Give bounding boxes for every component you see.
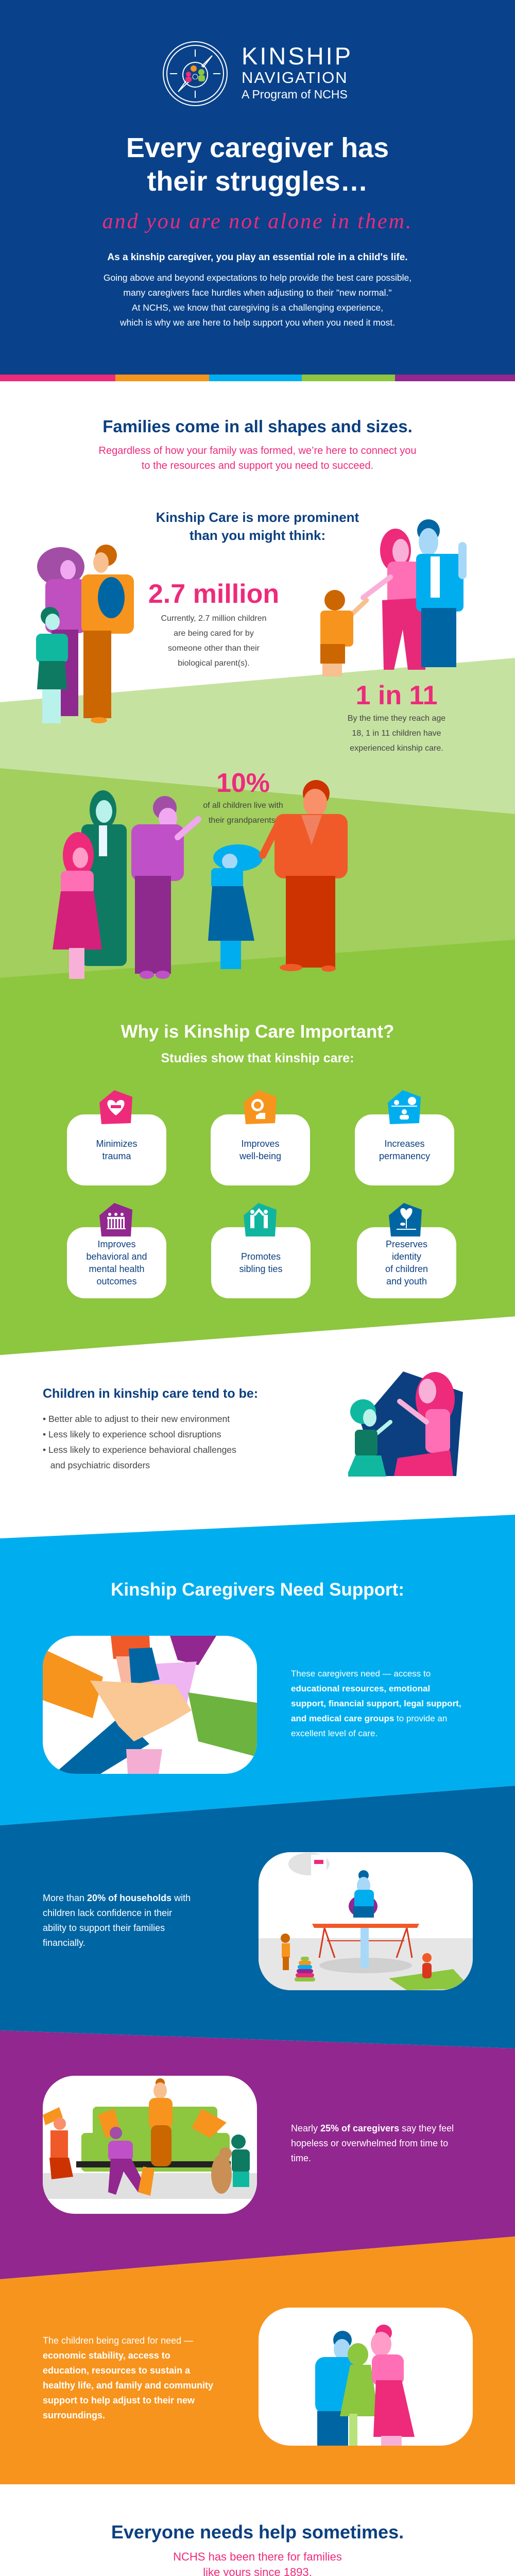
text: 25% of caregivers: Nearly 25% of caregivers say they feel hopeless or overwhelmed from time to time. [291,2123,454,2163]
bullet list: • Less likely to experience behavioral challenges [43,1445,236,1455]
stat: 2.7 million: are being cared for by [174,629,254,638]
stat: 10%: their grandparents. [209,816,278,825]
illustration: caregiver and child high five [348,1371,463,1477]
intro paragraph: many caregivers face hurdles when adjusting to their "new normal." [123,287,392,298]
card: minimizes trauma: Minimizes [96,1139,137,1149]
heading: why kinship care: Why is Kinship Care Important? [121,1022,394,1042]
script subtitle: and you are not alone in them. [102,210,413,233]
stat: 1 in 11: 18, 1 in 11 children have [352,729,441,738]
benefit cards [67,1114,456,1298]
card: permanency [355,1114,454,1185]
heading: families: Families come in all shapes and sizes. [102,417,413,436]
illustrations: families [36,519,467,979]
card: behavioral: outcomes [96,1276,137,1286]
stat: 10% [203,768,283,825]
stat: 1 in 11 [348,681,445,753]
card: identity: of children [385,1264,428,1274]
card: behavioral: mental health [89,1264,145,1274]
icon: people group [99,1203,132,1236]
icon: siblings arch [244,1203,277,1236]
card: identity: and youth [386,1276,427,1286]
card: identity [357,1227,456,1298]
intro paragraph [104,273,411,328]
logo text: A Program of NCHS [242,88,348,101]
intro bold line: As a kinship caregiver, you play an essential role in a child's life. [107,252,408,263]
logo text: KINSHIP [242,42,353,70]
pink subtext [99,445,416,471]
card: behavioral: behavioral and [86,1251,147,1262]
card: minimizes trauma [67,1114,166,1185]
stat: 1 in 11: By the time they reach age [348,714,445,723]
card: sibling ties: Promotes [241,1251,281,1262]
card: minimizes trauma: trauma [102,1151,131,1161]
stat: 2.7 million: 2.7 million [148,579,279,609]
heading: children in kinship care: Children in kinship care tend to be: [43,1386,258,1401]
bullet list [43,1414,236,1470]
text: 20% of households: More than 20% of households with children lack confidence in their ability to support their families financially. [43,1893,191,1948]
image card: stacked hands [43,1636,257,1774]
intro paragraph: which is why we are here to help support you when you need it most. [120,317,395,328]
pink subtext: to the resources and support you need to succeed. [142,460,373,471]
intro paragraph: At NCHS, we know that caregiving is a challenging experience, [132,302,383,313]
support text: These caregivers need — access to educational resources, emotional support, financial support, legal support, and medical care groups to provide an excellent level of care. [291,1669,461,1738]
subheading: more prominent [156,510,359,543]
logo: kinship navigation compass [163,41,228,106]
intro paragraph: Going above and beyond expectations to help provide the best care possible, [104,273,411,283]
icon: heart plant [389,1203,422,1236]
card: permanency: Increases [384,1139,425,1149]
subheading: studies: Studies show that kinship care: [161,1051,354,1065]
bullet list: and psychiatric disorders [50,1460,150,1470]
subheading: more prominent: than you might think: [190,528,325,543]
bullet list: • Less likely to experience school disruptions [43,1429,221,1439]
card: behavioral [67,1227,166,1298]
stat: 2.7 million: Currently, 2.7 million children [161,614,267,623]
stat: 1 in 11: experienced kinship care. [350,744,443,753]
logo text [242,42,353,101]
icon: sunny head [244,1090,277,1124]
benefit icons [99,1090,422,1236]
icon: heart bandage [99,1090,132,1124]
stat: 2.7 million [148,579,279,668]
image card: hugging family [259,2308,473,2446]
card: identity: identity [392,1251,421,1262]
card: permanency: permanency [379,1151,430,1161]
image card: busy living room [43,2076,257,2214]
title [126,132,389,197]
card: behavioral: Improves [97,1239,136,1249]
pink subtext: since 1893 [173,2550,342,2576]
stat: 1 in 11: 1 in 11 [355,681,438,710]
title: Every caregiver has [126,132,389,163]
stat: 10%: 10% [216,768,270,798]
title: their struggles… [147,166,368,197]
image card: caregiver at desk [259,1852,473,1990]
heading: caregivers need support: Kinship Caregivers Need Support: [111,1580,404,1600]
bullet list: • Better able to adjust to their new environment [43,1414,230,1424]
stat: 2.7 million: someone other than their [168,644,260,653]
heading: everyone needs help: Everyone needs help sometimes. [111,2521,404,2543]
card: sibling ties [211,1227,311,1298]
card: sibling ties: sibling ties [239,1264,283,1274]
text: children need: The children being cared for need — economic stability, access to education, resources to sustain a healthy life, and family and community support to help adjust to their new surroundings. [43,2335,213,2420]
card: well-being: well-being [239,1151,281,1161]
card: well-being [211,1114,310,1185]
logo text: NAVIGATION [242,69,348,87]
icon: balance [388,1090,421,1124]
pink subtext: Regardless of how your family was formed, we’re here to connect you [99,445,416,456]
pink subtext: since 1893: NCHS has been there for families [173,2550,342,2563]
card: well-being: Improves [241,1139,279,1149]
family left [36,545,134,723]
grandparents group [53,780,348,979]
stat: 10%: of all children live with [203,801,283,810]
family right [320,519,467,676]
stat: 2.7 million: biological parent(s). [178,659,250,668]
card: identity: Preserves [386,1239,427,1249]
subheading: more prominent: Kinship Care is more prominent [156,510,359,525]
